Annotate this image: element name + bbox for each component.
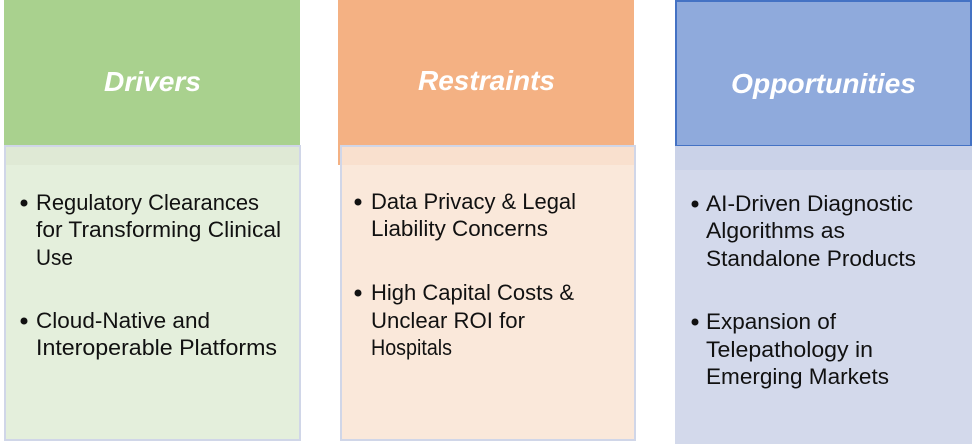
opportunities header [676, 1, 971, 146]
drivers bullet list: for Transforming Clinical [36, 217, 281, 242]
restraints bullet list [354, 189, 576, 360]
drivers bullet list [20, 190, 281, 360]
opportunities bullet list: Expansion of [706, 309, 837, 334]
restraints bullet list: High Capital Costs & [371, 280, 574, 305]
drivers bullet list: Use [36, 245, 73, 270]
drivers body box [5, 146, 300, 440]
opportunities bullet list: Emerging Markets [706, 364, 889, 389]
opportunities overlap band [675, 146, 972, 170]
restraints overlap band [342, 147, 634, 165]
panel: drivers [4, 0, 300, 440]
opportunities heading: Opportunities [731, 68, 916, 99]
drivers bullet list: Interoperable Platforms [36, 335, 277, 360]
drivers heading: Drivers [104, 66, 201, 97]
restraints bullet list: Hospitals [371, 335, 452, 360]
drivers bullet list: Cloud-Native and [36, 308, 210, 333]
restraints heading: Restraints [418, 65, 555, 96]
drivers header [4, 0, 300, 146]
opportunities bullet list: Algorithms as [706, 218, 845, 243]
drivers overlap band [6, 147, 299, 165]
panel: restraints [338, 0, 635, 440]
opportunities body box [675, 146, 972, 444]
restraints bullet list: Unclear ROI for [371, 308, 525, 333]
restraints bullet list: Data Privacy & Legal [371, 189, 576, 214]
opportunities bullet list: AI-Driven Diagnostic [706, 191, 913, 216]
opportunities bullet list: Telepathology in [706, 337, 873, 362]
restraints header [338, 0, 634, 165]
opportunities bullet list [692, 191, 916, 389]
drivers bullet list: Regulatory Clearances [36, 190, 259, 215]
opportunities bullet list: Standalone Products [706, 246, 916, 271]
panel: opportunities [675, 1, 972, 444]
restraints bullet list: Liability Concerns [371, 216, 548, 241]
restraints body box [341, 146, 635, 440]
